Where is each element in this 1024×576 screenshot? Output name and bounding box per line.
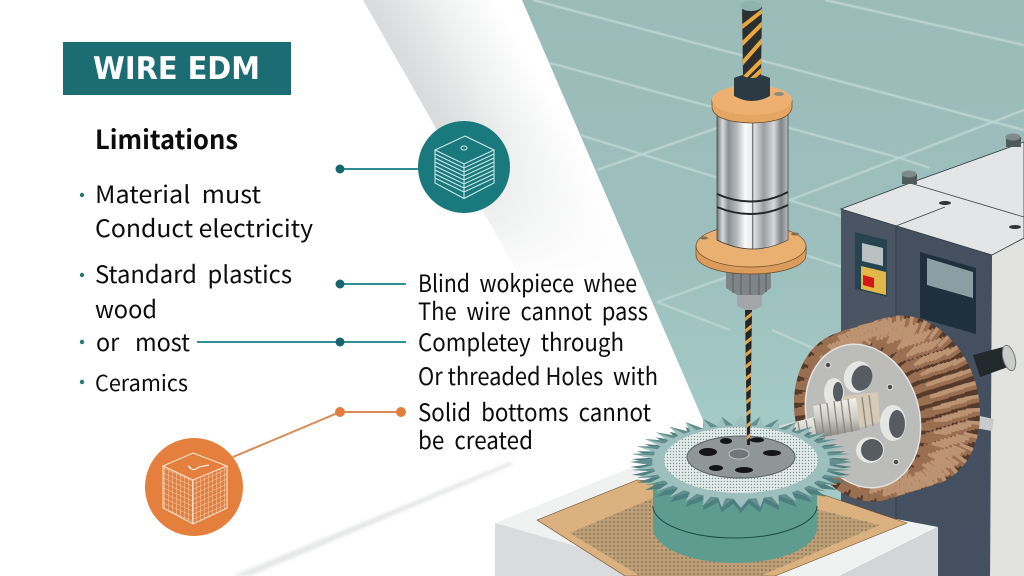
gear teeth shadow	[630, 421, 852, 513]
title banner	[63, 42, 291, 95]
connector: or most	[197, 338, 406, 346]
gear grey face	[788, 330, 938, 502]
control screen right	[920, 252, 976, 334]
red button	[863, 275, 874, 288]
bullet: standard plastics wood: Standard plastics	[95, 255, 292, 290]
bullet: standard plastics wood	[80, 255, 292, 325]
gear teeth top	[630, 416, 852, 508]
icon: teal stacked layers	[418, 121, 510, 213]
gear holes	[824, 357, 906, 463]
lower flange	[696, 225, 806, 274]
callout text: blind workpiece limitation	[418, 264, 658, 456]
machine: wire EDM spindle	[696, 1, 806, 445]
bullet: or most: or most	[96, 323, 190, 358]
control panel left	[855, 232, 887, 297]
bullet: material must conduct electricity: Conduct electricity	[95, 209, 313, 244]
gear teeth shading	[630, 417, 852, 507]
drive shaft right	[973, 344, 1018, 431]
gear fins	[782, 307, 992, 510]
machine: teal workpiece gear	[630, 416, 852, 513]
panel: bottom diagonal shadow edge	[232, 462, 514, 576]
tray perforated surface	[570, 497, 880, 576]
title banner: WIRE EDM	[93, 51, 260, 87]
bullet: material must conduct electricity	[80, 175, 313, 244]
bullet: material must conduct electricity: Material must	[95, 175, 261, 210]
connector: blind workpiece	[336, 280, 406, 288]
connector: orange icon	[233, 407, 406, 457]
connector: teal icon	[336, 164, 425, 174]
machine: base with tray	[495, 468, 938, 576]
striped wire	[745, 310, 752, 445]
bullet list: limitations	[80, 175, 313, 398]
spindle cylinder	[717, 115, 788, 249]
callout text: blind workpiece limitation: The wire cannot pass	[418, 292, 648, 327]
callout text: blind workpiece limitation: be created	[418, 421, 533, 456]
bullet: ceramics: Ceramics	[95, 366, 188, 398]
mesh ring	[664, 427, 818, 493]
machine: green cylinder base	[653, 480, 817, 563]
upper flange	[712, 85, 792, 123]
splined shaft	[778, 392, 880, 450]
callout text: blind workpiece limitation: Blind wokpiece whee	[418, 264, 637, 299]
icon: orange mesh cube	[145, 438, 243, 536]
lower nut	[726, 272, 771, 310]
cabinet front	[841, 209, 992, 576]
striped rod	[740, 1, 762, 78]
machine: brown finned gear	[778, 307, 1018, 510]
callout text: blind workpiece limitation: Solid bottoms cannot	[418, 393, 651, 428]
top screws	[902, 134, 1021, 229]
panel: grey diagonal wedge	[363, 0, 660, 320]
tray rim	[537, 480, 907, 576]
panel: teal grid backdrop	[522, 0, 1024, 576]
heading: Limitations: Limitations	[95, 120, 238, 157]
gear bolts	[825, 362, 899, 465]
cabinet side	[990, 238, 1024, 576]
gear body drum	[782, 307, 992, 510]
callout text: blind workpiece limitation: Or threaded Holes with	[418, 357, 658, 392]
callout text: blind workpiece limitation: Completey through	[418, 323, 624, 358]
bullet: standard plastics wood: wood	[95, 290, 157, 325]
cabinet top	[841, 142, 1024, 255]
gear fin highlights	[798, 307, 992, 505]
machine: right cabinet	[841, 134, 1024, 576]
plate holes	[699, 438, 781, 473]
centre plate	[687, 436, 795, 478]
dark collar	[734, 74, 770, 101]
